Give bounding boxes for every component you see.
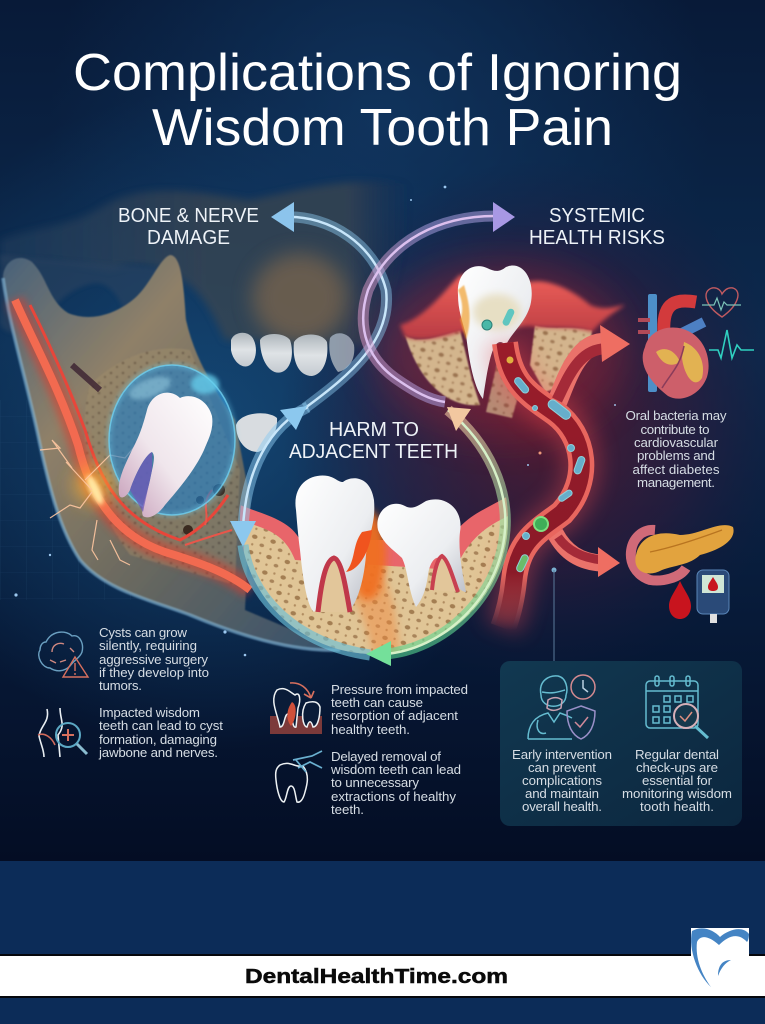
text: regular check-ups [622,747,732,814]
heading: bone and nerve damage: DAMAGE [147,226,230,249]
text: regular check-ups: monitoring wisdom [622,786,732,801]
text: early intervention: can prevent [528,760,596,775]
callout: oral bacteria: contribute to [640,422,710,437]
footer band [0,861,765,1024]
icon: tooth extraction [276,751,322,802]
text: delayed removal: wisdom teeth can lead [330,762,461,777]
text: cysts [99,625,209,693]
logo: tooth [691,928,749,987]
text: impacted wisdom teeth: formation, damaging [99,732,217,747]
illustration: infected tooth and gum [375,265,625,435]
icon: jaw magnifier [38,708,87,757]
text: cysts: if they develop into [99,665,209,680]
callout: oral bacteria: management. [637,475,715,490]
text: pressure: healthy teeth. [331,722,410,737]
icon: glucose meter [697,570,729,623]
text: regular check-ups: check-ups are [636,760,718,775]
title: Wisdom Tooth Pain [152,99,613,157]
callout: oral bacteria [626,408,727,490]
text: pressure: teeth can cause [331,695,423,710]
text: pressure: resorption of adjacent [331,708,458,723]
panel: prevention [500,661,742,826]
icon: heart [638,294,709,399]
text: delayed removal [330,749,461,817]
callout: oral bacteria: Oral bacteria may [626,408,727,423]
arrow: green and orange ring [366,407,505,666]
icon: tooth pressure [270,683,322,734]
illustration: skull and upper teeth [0,182,410,376]
text: regular check-ups: tooth health. [640,799,714,814]
text: cysts: aggressive surgery [99,652,208,667]
text: impacted wisdom teeth [98,705,223,760]
illustration: adjacent teeth with decay [240,476,510,660]
callout: oral bacteria: cardiovascular [634,435,719,450]
text: cysts: tumors. [99,678,142,693]
icon: cyst warning [39,632,88,677]
text: delayed removal: Delayed removal of [331,749,441,764]
text: impacted wisdom teeth: teeth can lead to cyst [99,718,223,733]
icon: blood drop [669,581,691,619]
callout: oral bacteria: problems and [637,448,715,463]
arrow: blue loop to bone and nerve damage [271,202,387,408]
icon: calendar and magnifier [646,676,708,738]
arrow: purple loop to systemic health risks [363,202,515,402]
text: early intervention: complications [522,773,602,788]
text: early intervention [512,747,612,814]
heading: systemic health risks [529,204,665,249]
icon: pancreas [631,525,734,580]
heading: harm to adjacent teeth: ADJACENT TEETH [289,440,458,463]
icon: clock [571,675,595,699]
title: Complications of Ignoring [73,44,682,102]
text: regular check-ups: essential for [642,773,713,788]
callout: oral bacteria: affect diabetes [632,462,720,477]
heading: systemic health risks: HEALTH RISKS [529,226,665,249]
text: impacted wisdom teeth: Impacted wisdom [99,705,200,720]
text: pressure [331,682,468,737]
text: delayed removal: teeth. [331,802,364,817]
icon: ecg pulse [709,330,754,358]
connector line to prevention panel [552,568,556,661]
heading: bone and nerve damage: BONE & NERVE [118,204,259,227]
illustration: blood vessel with bacteria [503,325,630,628]
heading: bone and nerve damage [118,204,259,249]
text: regular check-ups: Regular dental [635,747,719,762]
icon: shield [567,706,595,739]
text: early intervention: Early intervention [512,747,612,762]
illustration: jawbone [3,255,340,650]
text: cysts: silently, requiring [99,638,197,653]
heading: harm to adjacent teeth [289,418,458,463]
illustration: impacted wisdom tooth in cyst [109,365,235,517]
illustration: nerve [15,300,250,590]
heading: harm to adjacent teeth: HARM TO [329,418,419,441]
heading: systemic health risks: SYSTEMIC [549,204,645,227]
arrow: blue curve around adjacent teeth [230,406,370,655]
text: delayed removal: extractions of healthy [331,789,456,804]
text: delayed removal: to unnecessary [331,775,419,790]
text: impacted wisdom teeth: jawbone and nerves. [98,745,218,760]
title [73,44,682,157]
text: pressure: Pressure from impacted [331,682,468,697]
text: early intervention: overall health. [522,799,602,814]
text: cysts: Cysts can grow [99,625,187,640]
text: early intervention: and maintain [525,786,599,801]
icon: heart rate heart [702,288,741,317]
footer website text: DentalHealthTime.com [245,966,508,988]
icon: doctor [528,675,595,739]
